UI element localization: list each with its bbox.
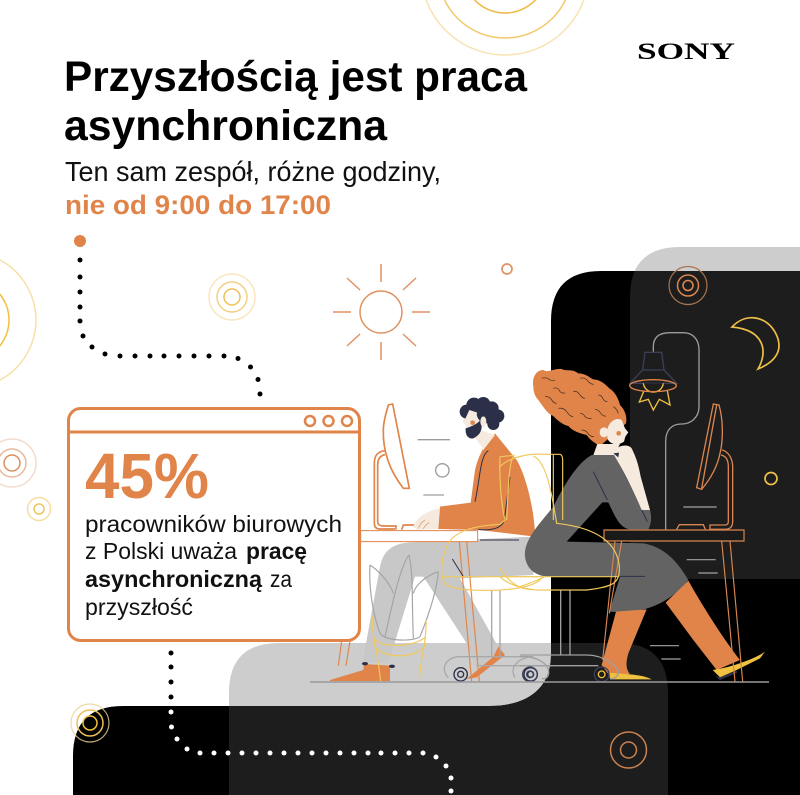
- forearm and hand: [613, 446, 650, 511]
- monitor: [374, 404, 414, 530]
- shoes: [330, 647, 505, 681]
- desk legs: [603, 541, 743, 682]
- head: [593, 419, 628, 457]
- decorative rings: top: [421, 0, 589, 55]
- illustration: woman at desk: [500, 333, 765, 682]
- hair: [533, 369, 626, 446]
- dotted path: bottom: [168, 650, 454, 794]
- icon: moon: [732, 318, 779, 369]
- decorative rings: yellow small: [28, 498, 50, 520]
- wheels: [454, 668, 537, 681]
- chair stand: [444, 590, 553, 678]
- decorative rings: on black corner: [71, 704, 109, 742]
- window buttons: [305, 416, 352, 426]
- dress: [525, 455, 688, 612]
- wheels: [523, 667, 609, 682]
- body text: [85, 511, 342, 620]
- desk: [361, 531, 478, 542]
- subtitle: Ten sam zespół, różne godziny,: [65, 156, 441, 187]
- decorative rings: centre: [209, 274, 255, 320]
- background shapes: [73, 247, 800, 795]
- chair stand: [520, 590, 618, 679]
- decorative rings: top right panel: [669, 266, 707, 304]
- notes lines: [418, 440, 450, 495]
- legs: [363, 537, 533, 668]
- decorative rings: left edge: [0, 252, 36, 388]
- illustration: man at desk: [330, 397, 553, 682]
- title: asynchroniczna: [64, 102, 388, 150]
- lamp: [630, 352, 677, 410]
- torso: [438, 433, 535, 537]
- plant: [370, 555, 438, 640]
- legs: [602, 581, 740, 674]
- hand: [413, 508, 439, 530]
- body text: przyszłość: [85, 594, 193, 620]
- body text: z Polski uważa: [85, 538, 238, 564]
- lamp cord: [653, 333, 699, 529]
- title: [64, 53, 528, 150]
- body text: pracowników biurowych: [85, 511, 342, 537]
- small circle: yellow: [765, 472, 777, 484]
- desk: [604, 530, 744, 541]
- plant pot: [372, 615, 426, 682]
- body text: asynchroniczną: [85, 566, 263, 592]
- statistic: 45%: [85, 440, 209, 512]
- logo: SONY: SONY: [637, 39, 736, 64]
- window card: [68, 408, 360, 640]
- shoes: [609, 652, 765, 680]
- notes lines: [650, 507, 718, 659]
- subtitle: [65, 156, 441, 220]
- title: Przyszłością jest praca: [64, 53, 528, 101]
- icon: sun: [333, 264, 430, 360]
- body text: pracę: [246, 538, 307, 564]
- monitor: [677, 404, 733, 529]
- subtitle: nie od 9:00 do 17:00: [65, 190, 331, 220]
- decorative rings: bottom panel: [610, 732, 646, 768]
- chair: [500, 454, 619, 590]
- desk legs: [338, 542, 479, 682]
- decorative rings: orange left: [0, 439, 36, 487]
- head: [460, 397, 504, 450]
- ground line: [310, 681, 769, 683]
- chair: [442, 455, 542, 590]
- dotted path: top: [74, 235, 262, 396]
- small circle: orange: [502, 264, 512, 274]
- body text: za: [270, 566, 293, 592]
